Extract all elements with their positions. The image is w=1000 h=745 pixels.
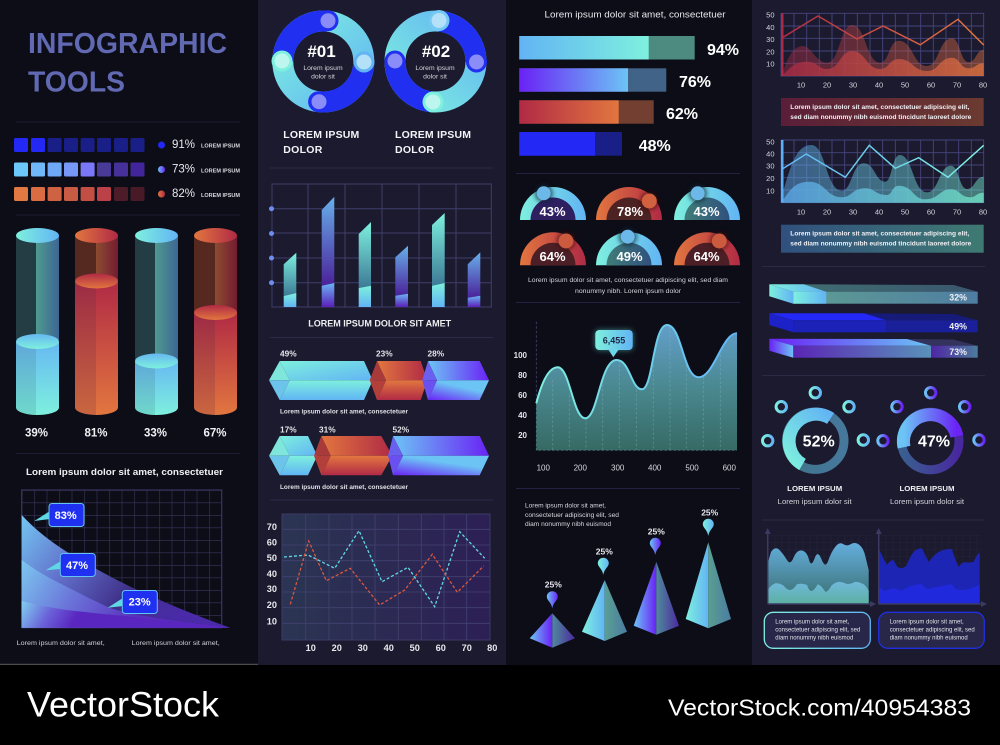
dashed line chart: 60 [436, 643, 446, 653]
ring gauge 52%: Lorem ipsum dolor sit [778, 497, 853, 506]
dashed line chart: 50 [267, 553, 277, 563]
pyramid 1 [530, 580, 575, 648]
callout 23% [108, 590, 157, 614]
red line and area chart: 10 [797, 81, 805, 90]
panel: column 1 [14, 28, 240, 647]
hexagonal segmented bar 2 [269, 424, 489, 491]
cylinder 33%: 33% [144, 428, 167, 440]
progress bar 48%: 48% [639, 138, 671, 155]
callout 83% [34, 504, 84, 526]
smooth area chart: 80 [518, 371, 528, 380]
progress bar 94%: 94% [707, 42, 739, 59]
note box left: diam nonummy nibh euismod [775, 634, 854, 642]
teal line and area chart: 10 [797, 208, 805, 216]
donut labels: DOLOR [395, 144, 434, 156]
red line and area chart: 40 [766, 23, 774, 32]
teal chart caption [781, 225, 984, 253]
donut labels: DOLOR [283, 144, 323, 156]
wedge area chart [22, 490, 230, 628]
donut labels: LOREM IPSUM [395, 129, 471, 141]
gauge 49%: 49% [616, 249, 643, 264]
donut #02: #02 [422, 42, 450, 61]
teal line and area chart: 40 [766, 150, 774, 159]
footer logo: VectorStock [27, 686, 220, 725]
cylinder chart [16, 228, 237, 440]
dashed line chart: 70 [267, 522, 277, 532]
gauge 43%: 43% [539, 204, 566, 219]
3D bar 73%: 73% [949, 347, 967, 357]
red line and area chart: 50 [766, 11, 774, 20]
smooth area chart: 400 [648, 463, 662, 472]
donut #01: #01 [307, 42, 336, 61]
dashed line chart: 40 [384, 643, 394, 653]
red line and area chart: 80 [979, 81, 987, 90]
callout 47%: 47% [66, 560, 88, 572]
smooth area chart: 40 [518, 411, 528, 420]
donut labels: LOREM IPSUM [283, 129, 360, 141]
ring gauge 47%: Lorem ipsum dolor sit [890, 497, 965, 506]
legend for square rows: LOREM IPSUM [201, 144, 240, 150]
pyramid 4: 25% [701, 507, 719, 517]
ring gauge 47% [878, 388, 984, 506]
ring gauge 52%: LOREM IPSUM [787, 484, 842, 493]
gauge 64% right: 64% [693, 249, 720, 264]
hexagonal segmented bar 1: 49% [280, 348, 297, 358]
3D bar 32%: 32% [949, 292, 967, 302]
pyramid 1: 25% [545, 580, 562, 590]
gauge 78% [596, 187, 662, 220]
cylinder 39%: 39% [25, 428, 48, 440]
pyramid chart [530, 507, 731, 648]
smooth area chart: 600 [723, 463, 737, 472]
note box right: Lorem ipsum dolor sit amet, [890, 619, 964, 626]
note box right: diam nonummy nibh euismod [890, 634, 968, 642]
legend for square rows: LOREM IPSUM [201, 168, 240, 174]
ring gauge 47%: LOREM IPSUM [900, 484, 954, 493]
note box left [764, 612, 870, 648]
smooth area chart: 60 [518, 391, 528, 400]
red line and area chart: 40 [875, 81, 883, 90]
teal line and area chart: 70 [953, 208, 961, 216]
teal line and area chart: 20 [766, 174, 774, 183]
legend for square rows: 91% [172, 139, 195, 151]
dashed line chart: 20 [332, 643, 342, 653]
cylinder 67% [194, 228, 237, 440]
dashed line chart: 20 [267, 600, 277, 610]
callout 47% [46, 554, 95, 576]
gauge 43% right: 43% [693, 204, 720, 219]
red line and area chart: 30 [849, 81, 857, 90]
gauge caption [528, 277, 729, 295]
wedge chart captions: Lorem ipsum dolor sit amet, [17, 640, 105, 647]
teal line and area chart [766, 137, 987, 216]
tooltip 6,455: 6,455 [603, 336, 625, 346]
pyramid text: consectetuer adipiscing elit, sed [525, 512, 619, 519]
teal line and area chart: 50 [766, 137, 774, 146]
wedge chart captions [17, 640, 220, 647]
teal line and area chart: 20 [823, 208, 831, 216]
smooth area chart: 100 [537, 463, 551, 472]
teal line and area chart: 80 [979, 208, 987, 216]
donut #02 [384, 10, 487, 112]
gauge 43% [520, 184, 586, 220]
teal chart caption: Lorem ipsum dolor sit amet, consectetuer adipiscing elit, [790, 231, 970, 238]
pyramid 3: 25% [648, 527, 665, 537]
red line and area chart: 50 [901, 81, 909, 90]
smooth area chart: 500 [685, 463, 699, 472]
hexagonal segmented bar 1: Lorem ipsum dolor sit amet, consectetuer [280, 410, 409, 416]
gauge 78%: 78% [617, 204, 643, 219]
title: INFOGRAPHIC [28, 28, 227, 60]
donut #02: Lorem ipsum [415, 65, 455, 72]
dashed line chart: 30 [267, 584, 277, 594]
pyramid 3 [634, 527, 679, 635]
hexagonal segmented bar 2: Lorem ipsum dolor sit amet, consectetuer [280, 485, 409, 491]
red chart caption: Lorem ipsum dolor sit amet, consectetuer adipiscing elit, [790, 104, 970, 111]
gauge 64% [520, 232, 586, 265]
red line and area chart: 10 [766, 60, 774, 69]
semicircle gauges [520, 184, 740, 265]
smooth area chart: 100 [514, 351, 528, 360]
hexagonal segmented bar 1: 28% [428, 348, 445, 358]
dashed line chart: 80 [487, 643, 497, 653]
small area chart right [876, 528, 987, 607]
cylinder 81%: 81% [84, 428, 108, 440]
3D column chart [269, 184, 491, 307]
progress bar 62%: 62% [666, 106, 698, 123]
legend for square rows [158, 139, 240, 200]
smooth area chart: 300 [611, 463, 625, 472]
note box right: consectetuer adipiscing elit, sed [890, 627, 975, 634]
panel: column 2 [267, 10, 497, 653]
title: TOOLS [28, 66, 125, 98]
hexagonal segmented bar 1 [269, 348, 489, 416]
legend for square rows: 82% [172, 188, 195, 200]
red line and area chart: 20 [823, 81, 831, 90]
cylinder 81% [75, 228, 118, 440]
donut #01 [272, 10, 374, 112]
ring gauge 47%: 47% [918, 434, 950, 450]
gauge caption: nonummy nibh. Lorem ipsum dolor [575, 288, 682, 295]
teal line and area chart: 10 [766, 186, 774, 195]
cylinder 67%: 67% [203, 428, 227, 440]
cylinder 33% [135, 228, 178, 440]
legend for square rows: LOREM IPSUM [201, 193, 240, 199]
dashed line chart: 50 [410, 643, 420, 653]
small area chart left [765, 528, 876, 607]
dashed line chart [267, 514, 497, 653]
dashed line chart: 30 [358, 643, 368, 653]
column chart caption: LOREM IPSUM DOLOR SIT AMET [308, 318, 452, 328]
note box left: Lorem ipsum dolor sit amet, [775, 619, 850, 626]
progress bar 94% [519, 36, 739, 60]
ring gauge 52% [762, 388, 868, 506]
pyramid 2 [582, 547, 627, 641]
hexagonal segmented bar 2: 52% [392, 424, 410, 434]
donut #01: Lorem ipsum [303, 65, 343, 72]
progress bar 48% [519, 132, 671, 156]
callout 23%: 23% [129, 597, 151, 609]
pyramid text [525, 502, 619, 528]
note box left: consectetuer adipiscing elit, sed [775, 627, 861, 634]
3D bar 32% [769, 284, 978, 304]
hexagonal segmented bar 2: 17% [280, 424, 297, 434]
progress bar 62% [519, 100, 698, 124]
3D bar 49%: 49% [949, 322, 967, 332]
smooth area chart: 200 [574, 463, 588, 472]
dashed line chart: 40 [267, 569, 277, 579]
dashed line chart: 60 [267, 538, 277, 548]
panel: column 3 [514, 10, 740, 648]
dashed line chart: 70 [462, 643, 472, 653]
pyramid 4 [686, 507, 731, 628]
gauge 49% [596, 228, 662, 265]
teal line and area chart: 50 [901, 208, 909, 216]
progress bar 76%: 76% [679, 74, 711, 91]
teal line and area chart: 30 [849, 208, 857, 216]
red line and area chart: 60 [927, 81, 935, 90]
teal line and area chart: 40 [875, 208, 883, 216]
callout 83%: 83% [55, 510, 77, 522]
red line and area chart: 70 [953, 81, 961, 90]
red line and area chart [766, 11, 987, 90]
3D bar 49% [769, 313, 978, 332]
smooth area chart [514, 322, 737, 472]
footer url: VectorStock.com/40954383 [668, 695, 971, 721]
square progress rows [14, 138, 144, 201]
progress bar 76% [519, 68, 711, 92]
note box right [879, 612, 984, 648]
red chart caption: sed diam nonummy nibh euismod tincidunt laoreet dolore [790, 114, 972, 121]
wedge chart captions: Lorem ipsum dolor sit amet, [132, 640, 220, 647]
gauge caption: Lorem ipsum dolor sit amet, consectetuer adipiscing elit, sed diam [528, 277, 729, 284]
hexagonal segmented bar 2: 31% [319, 424, 336, 434]
dashed line chart: 10 [306, 643, 316, 653]
red chart caption [781, 98, 984, 126]
smooth area chart: 20 [518, 431, 528, 440]
gauge 64%: 64% [539, 249, 566, 264]
cylinder 39% [16, 228, 59, 440]
teal chart caption: sed diam nonummy nibh euismod tincidunt laoreet dolore [790, 240, 972, 248]
panel: column 4 [762, 11, 987, 648]
legend for square rows: 73% [172, 164, 195, 176]
red line and area chart: 30 [766, 35, 774, 44]
red line and area chart: 20 [766, 47, 774, 56]
gauge 64% right [674, 232, 740, 265]
gauge 43% right [674, 184, 740, 220]
pyramid 2: 25% [596, 547, 613, 557]
ring gauge 52%: 52% [803, 434, 835, 450]
teal line and area chart: 30 [766, 162, 774, 171]
dashed line chart: 10 [267, 616, 277, 626]
teal line and area chart: 60 [927, 208, 935, 216]
3D bar 73% [769, 339, 978, 358]
heading: progress bars: Lorem ipsum dolor sit amet, consectetuer [544, 10, 726, 20]
heading: wedge chart: Lorem ipsum dolor sit amet, consectetuer [26, 467, 223, 478]
donut #01: dolor sit [311, 74, 335, 80]
pyramid text: Lorem ipsum dolor sit amet, [525, 502, 606, 510]
pyramid text: diam nonummy nibh euismod [525, 521, 611, 528]
tooltip 6,455 [595, 330, 633, 357]
donut labels [283, 129, 471, 156]
hexagonal segmented bar 1: 23% [376, 348, 393, 358]
donut #02: dolor sit [423, 74, 447, 80]
title [28, 28, 227, 98]
